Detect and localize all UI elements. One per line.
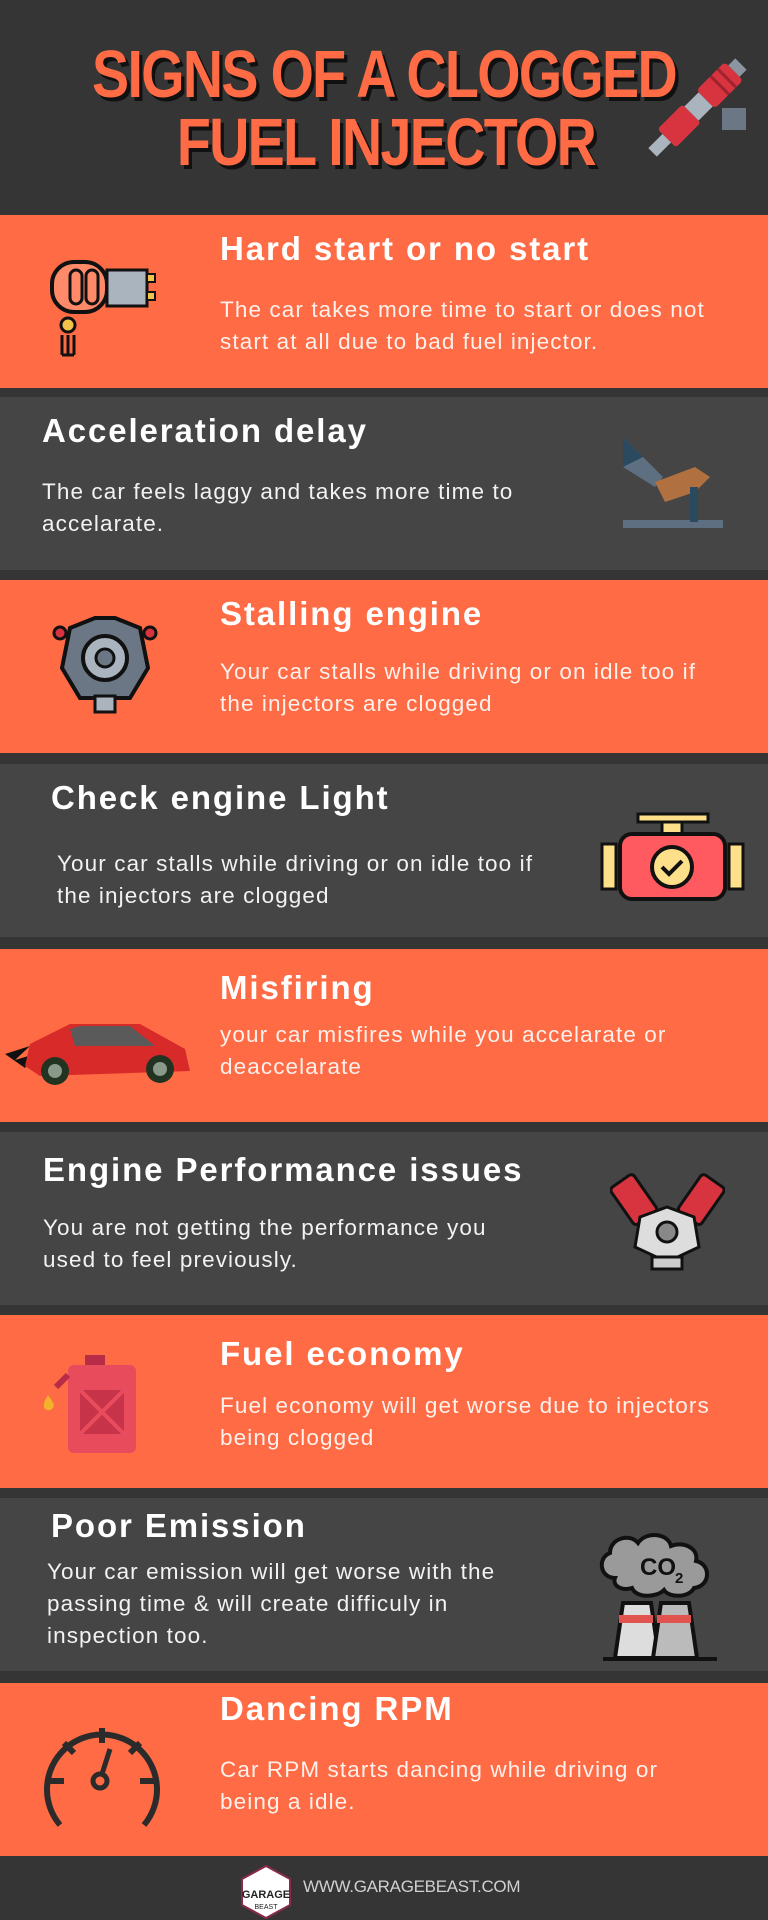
heading: Dancing RPM: [220, 1690, 454, 1727]
text: inspection too.: [47, 1623, 209, 1648]
text: used to feel previously.: [43, 1247, 298, 1272]
icon: red car: [5, 1024, 190, 1085]
heading: Misfiring: [220, 969, 375, 1006]
text: Your car emission will get worse with the: [47, 1559, 495, 1584]
icon: CO2 factory: CO: [640, 1554, 676, 1581]
panel: misfiring: [0, 949, 768, 1122]
text: [220, 659, 696, 716]
panel: check engine light: [0, 764, 768, 937]
footer text: WWW.GARAGEBEAST.COM: [303, 1877, 520, 1896]
heading: Poor Emission: [51, 1507, 307, 1544]
text: Your car stalls while driving or on idle too if: [57, 851, 533, 876]
heading: Fuel economy: [220, 1335, 465, 1372]
icon: logo: BEAST: [255, 1904, 278, 1911]
text: Car RPM starts dancing while driving or: [220, 1757, 658, 1782]
heading: Stalling engine: [220, 595, 483, 632]
panel: hard start: [0, 215, 768, 388]
text: Your car stalls while driving or on idle too if: [220, 659, 696, 684]
icon: ignition: [50, 260, 156, 356]
icon: fuel injector: [648, 58, 746, 156]
icon: logo: [241, 1865, 291, 1919]
text: The car takes more time to start or does not: [220, 297, 705, 322]
text: The car feels laggy and takes more time to: [42, 479, 513, 504]
text: start at all due to bad fuel injector.: [220, 329, 598, 354]
text: accelarate.: [42, 511, 164, 536]
text: being a idle.: [220, 1789, 356, 1814]
text: Fuel economy will get worse due to injectors: [220, 1393, 710, 1418]
title: FUEL INJECTOR: [177, 105, 595, 180]
text: [220, 1757, 658, 1814]
icon: v engine: [610, 1173, 725, 1270]
text: being clogged: [220, 1425, 374, 1450]
text: [42, 479, 513, 536]
icon: pedal: [623, 437, 723, 528]
icon: CO2 factory: [600, 1533, 717, 1661]
text: [220, 1393, 710, 1450]
text: deaccelarate: [220, 1054, 362, 1079]
heading: Hard start or no start: [220, 230, 590, 267]
heading: Check engine Light: [51, 779, 390, 816]
text: [47, 1559, 495, 1648]
panel: fuel economy: [0, 1315, 768, 1488]
icon: engine: [52, 616, 158, 714]
text: your car misfires while you accelarate or: [220, 1022, 666, 1047]
text: [220, 1022, 666, 1079]
panel: poor emission: [0, 1498, 768, 1671]
text: [57, 851, 533, 908]
icon: logo: GARAGE: [242, 1889, 290, 1901]
text: [43, 1215, 487, 1272]
text: the injectors are clogged: [220, 691, 493, 716]
panel: stalling engine: [0, 580, 768, 753]
heading: Acceleration delay: [42, 412, 368, 449]
icon: jerrycan: [44, 1355, 136, 1453]
text: You are not getting the performance you: [43, 1215, 487, 1240]
icon: CO2 factory: 2: [675, 1570, 683, 1587]
panel: dancing rpm: [0, 1683, 768, 1856]
icon: gauge: [44, 1728, 160, 1827]
text: passing time & will create difficuly in: [47, 1591, 448, 1616]
title: SIGNS OF A CLOGGED: [92, 37, 676, 112]
heading: Engine Performance issues: [43, 1151, 523, 1188]
title: [92, 37, 678, 180]
icon: check engine: [600, 812, 744, 901]
panel: acceleration delay: [0, 397, 768, 570]
footer: [0, 1856, 768, 1920]
text: [220, 297, 705, 354]
panel: engine performance: [0, 1132, 768, 1305]
text: the injectors are clogged: [57, 883, 330, 908]
